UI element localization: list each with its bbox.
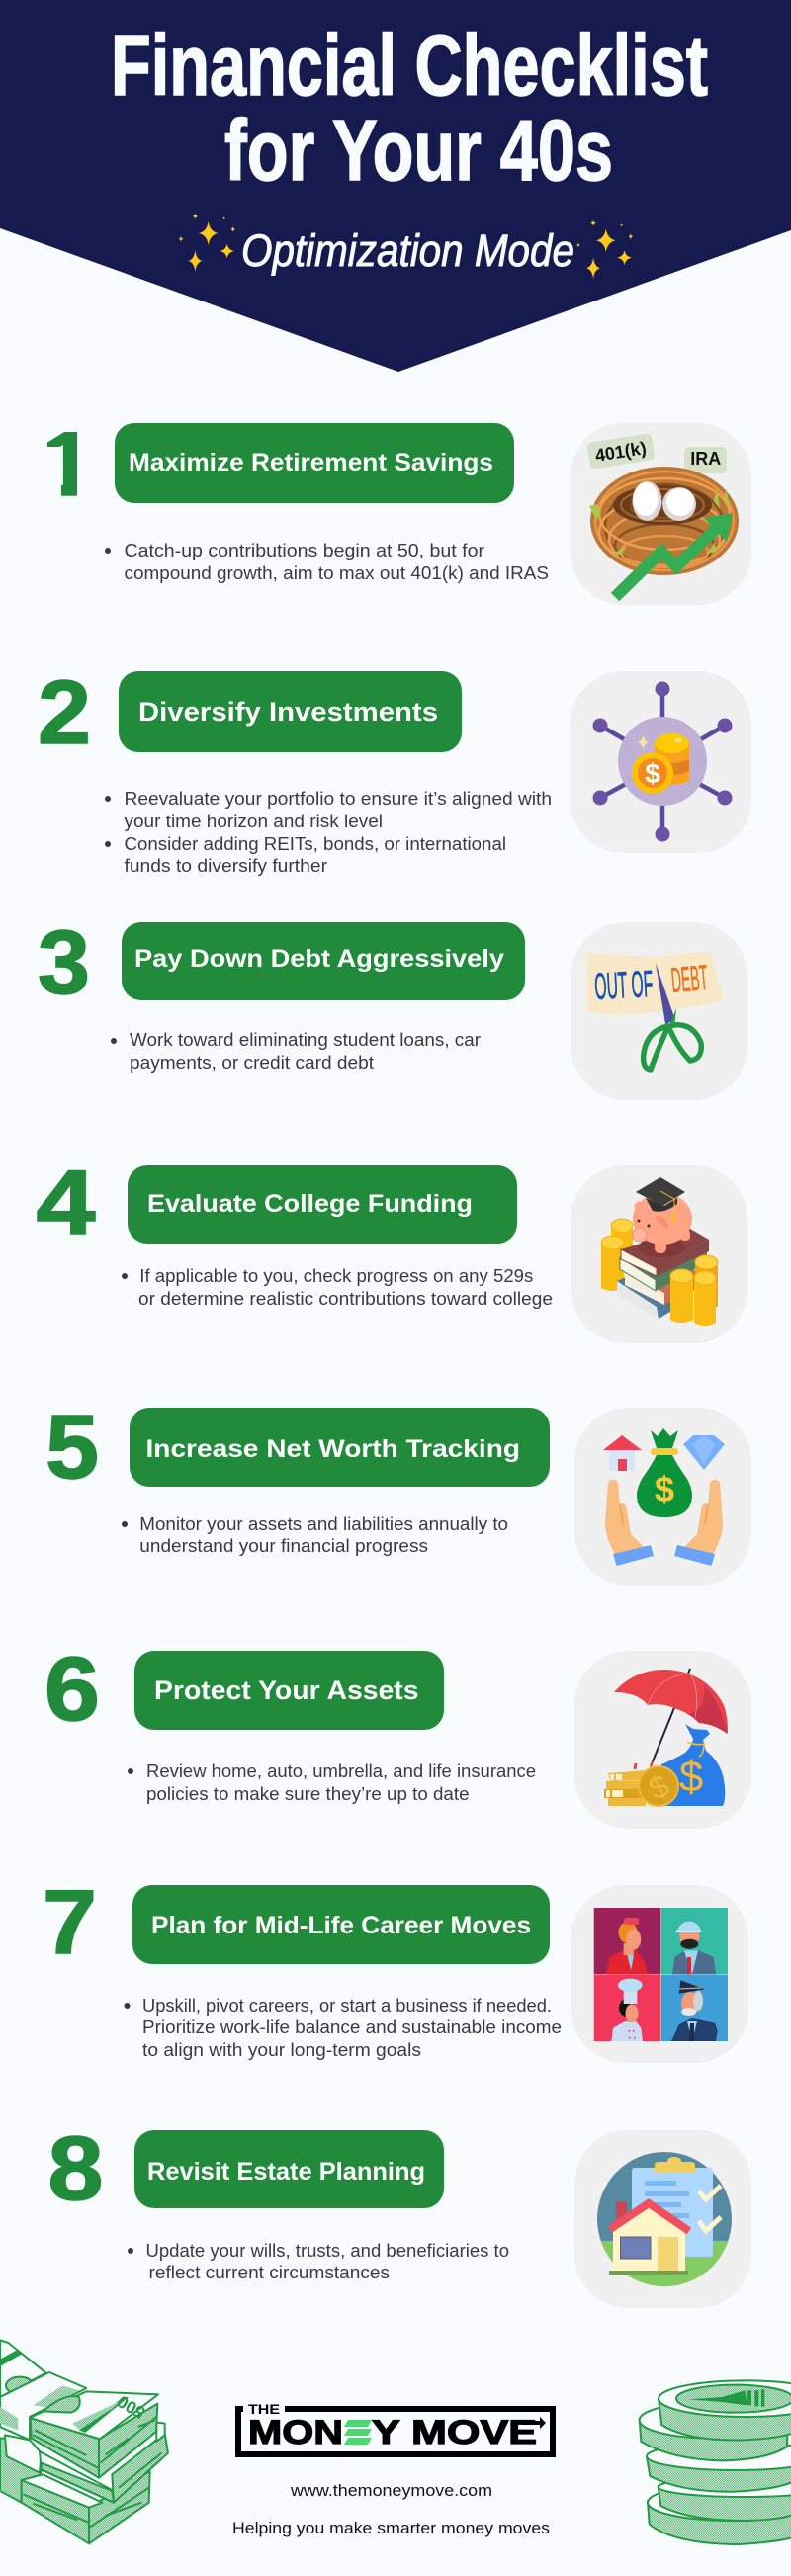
- body text: or determine realistic contributions toward college: [138, 1289, 553, 1309]
- icon: hands holding money bag, house and diamond: $: [655, 1469, 674, 1509]
- body text: [128, 2241, 509, 2282]
- website url: www.themoneymove.com: [290, 2481, 492, 2500]
- body text: If applicable to you, check progress on any 529s: [139, 1266, 533, 1286]
- heading: Plan for Mid-Life Career Moves: [132, 1885, 550, 1964]
- number 7: 7: [43, 1872, 97, 1973]
- body text: Prioritize work-life balance and sustainable income: [142, 2018, 562, 2037]
- icon: piggy bank with grad cap on books and coins: [571, 1165, 747, 1343]
- number 5: 5: [45, 1397, 99, 1498]
- logo: The Money Move: THE: [248, 2401, 280, 2417]
- heading: Increase Net Worth Tracking: [130, 1408, 550, 1487]
- body text: [122, 1514, 508, 1556]
- body text: funds to diversify further: [125, 856, 327, 876]
- body text: payments, or credit card debt: [130, 1053, 374, 1073]
- heading: Pay Down Debt Aggressively: [122, 922, 525, 1000]
- panel: step 2: [38, 662, 751, 876]
- heading: Revisit Estate Planning: Revisit Estate Planning: [147, 2158, 425, 2186]
- panel: step 1: [42, 414, 751, 605]
- footer illustration: cash stacks: 500: [114, 2391, 148, 2423]
- icon: diversification hub with coins: [570, 671, 751, 853]
- number 8: 8: [47, 2118, 103, 2219]
- number 4: 4: [36, 1153, 95, 1253]
- body text: to align with your long-term goals: [142, 2040, 421, 2060]
- logo: The Money Move: [238, 2401, 553, 2454]
- heading: Protect Your Assets: [134, 1651, 444, 1730]
- heading: Plan for Mid-Life Career Moves: Plan for Mid-Life Career Moves: [151, 1912, 531, 1939]
- subtitle: Optimization Mode: [241, 225, 574, 276]
- icon: umbrella over money bag and coins: [574, 1651, 751, 1829]
- header banner: [0, 0, 791, 372]
- body text: reflect current circumstances: [148, 2263, 390, 2282]
- icon: umbrella over money bag and coins: $: [679, 1753, 703, 1801]
- icon: umbrella over money bag and coins: $: [644, 1767, 674, 1807]
- panel: step 8: [47, 2118, 751, 2308]
- body text: Reevaluate your portfolio to ensure it’s aligned with: [125, 789, 552, 809]
- title: for Your 40s: [224, 103, 613, 199]
- body text: [105, 541, 549, 583]
- body text: Consider adding REITs, bonds, or international: [125, 834, 506, 854]
- icon: nest egg with labels and growth arrow: 401(k): [593, 438, 648, 466]
- icon: scissors cutting out-of-debt sign: DEBT: [669, 957, 710, 1000]
- body text: your time horizon and risk level: [125, 812, 383, 831]
- panel: step 6: [44, 1639, 751, 1829]
- footer illustration: cash stacks: [0, 2340, 168, 2543]
- heading: Evaluate College Funding: [128, 1165, 517, 1244]
- body text: [105, 789, 552, 876]
- body text: understand your financial progress: [139, 1536, 428, 1556]
- icon: left sparkles: [178, 214, 235, 272]
- icon: diversification hub with coins: $: [645, 758, 660, 789]
- body text: [128, 1761, 536, 1804]
- body text: Work toward eliminating student loans, car: [130, 1030, 481, 1050]
- body text: Review home, auto, umbrella, and life insurance: [146, 1761, 536, 1781]
- heading: Maximize Retirement Savings: Maximize Retirement Savings: [129, 449, 493, 476]
- heading: Protect Your Assets: Protect Your Assets: [154, 1675, 419, 1705]
- body text: [125, 1996, 562, 2060]
- tagline: Helping you make smarter money moves: [232, 2519, 550, 2537]
- icon: scissors cutting out-of-debt sign: OUT OF: [593, 964, 654, 1008]
- body text: Catch-up contributions begin at 50, but for: [125, 541, 484, 560]
- heading: Evaluate College Funding: Evaluate College Funding: [147, 1190, 473, 1218]
- body text: Upskill, pivot careers, or start a business if needed.: [142, 1996, 552, 2016]
- panel: step 7: [43, 1872, 748, 2063]
- number 3: 3: [38, 912, 90, 1013]
- heading: Increase Net Worth Tracking: Increase Net Worth Tracking: [146, 1435, 520, 1463]
- number 6: 6: [44, 1639, 100, 1740]
- icon: nest egg with labels and growth arrow: [570, 423, 751, 605]
- heading: Diversify Investments: [119, 671, 462, 752]
- footer illustration: coin stack: [640, 2380, 791, 2544]
- body text: [111, 1030, 481, 1073]
- panel: step 3: [38, 912, 747, 1100]
- icon: four career portraits: [571, 1885, 748, 2063]
- panel: step 4: [36, 1153, 747, 1343]
- title: [111, 18, 708, 199]
- body text: [122, 1266, 553, 1309]
- body text: compound growth, aim to max out 401(k) and IRAS: [125, 563, 549, 583]
- body text: Update your wills, trusts, and beneficiaries to: [146, 2241, 509, 2261]
- icon: house with checklist clipboard: [574, 2130, 751, 2308]
- heading: Revisit Estate Planning: [134, 2130, 444, 2208]
- panel: step 5: [45, 1397, 751, 1586]
- icon: nest egg with labels and growth arrow: IRA: [690, 449, 721, 469]
- logo: The Money Move: Y MOVE: [372, 2414, 537, 2451]
- heading: Diversify Investments: Diversify Investments: [138, 697, 438, 727]
- heading: Pay Down Debt Aggressively: Pay Down Debt Aggressively: [134, 945, 504, 973]
- body text: policies to make sure they’re up to date: [146, 1784, 470, 1804]
- icon: hands holding money bag, house and diamond: [574, 1408, 751, 1586]
- number 1: 1: [42, 414, 95, 515]
- icon: right sparkles: [576, 220, 633, 279]
- icon: scissors cutting out-of-debt sign: [571, 922, 747, 1100]
- body text: Monitor your assets and liabilities annually to: [139, 1514, 508, 1534]
- heading: Maximize Retirement Savings: [115, 423, 514, 503]
- number 2: 2: [38, 662, 91, 763]
- logo: The Money Move: MON: [248, 2414, 343, 2451]
